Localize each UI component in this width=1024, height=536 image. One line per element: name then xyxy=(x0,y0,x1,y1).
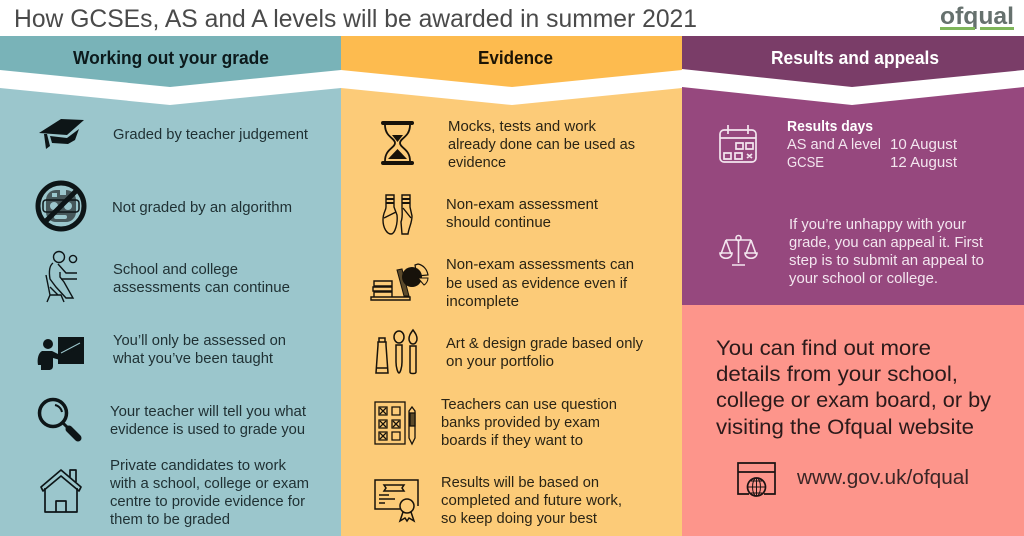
text: mocks and tests: evidence xyxy=(448,155,506,171)
text: not graded by an algorithm: Not graded by an algorithm xyxy=(112,200,292,216)
icon: house xyxy=(41,470,81,512)
icon: books and pie chart xyxy=(371,264,428,300)
text: find out more: You can find out more xyxy=(716,336,931,360)
text: art and design: on your portfolio xyxy=(446,354,554,370)
text: results based on work xyxy=(441,475,622,527)
panel: results and appeals xyxy=(682,36,1024,305)
text: art and design xyxy=(446,336,644,370)
icon: scales of justice xyxy=(720,236,757,265)
text: results days: 10 August xyxy=(890,137,957,153)
text: art and design: Art & design grade based only xyxy=(446,336,644,352)
text: teacher tells evidence xyxy=(110,404,306,438)
text: question banks: Teachers can use question xyxy=(441,397,617,413)
icon: calendar xyxy=(720,125,756,162)
panel body: evidence xyxy=(341,88,682,536)
text: non-exam assessment continue: should continue xyxy=(446,215,551,231)
logo: ofqual: ofqual xyxy=(940,3,1014,30)
text: teacher tells evidence: Your teacher will tell you what xyxy=(110,404,306,420)
icon: web browser xyxy=(738,463,775,496)
text: private candidates: with a school, college or exam xyxy=(109,476,309,492)
text: website url: www.gov.uk/ofqual xyxy=(796,467,969,489)
panel: evidence xyxy=(341,36,682,536)
text: appeal: grade, you can appeal it. First xyxy=(789,235,983,251)
text: mocks and tests xyxy=(448,119,635,171)
text: teacher tells evidence: evidence is used to grade you xyxy=(110,422,305,438)
text: private candidates: centre to provide evidence for xyxy=(110,494,305,510)
text: private candidates xyxy=(109,458,309,528)
text: appeal: step is to submit an appeal to xyxy=(789,253,984,269)
text: private candidates: Private candidates to work xyxy=(110,458,287,474)
title: How GCSEs, AS and A levels will be awarded in summer 2021 xyxy=(14,5,697,33)
icon: question sheet and pen xyxy=(375,402,415,444)
header band: working out your grade xyxy=(0,36,341,87)
icon: certificate xyxy=(375,480,418,521)
text: non-exam assessments as evidence xyxy=(446,257,634,310)
panel: working out your grade xyxy=(0,36,341,536)
text: find out more: visiting the Ofqual website xyxy=(716,415,974,439)
text: mocks and tests: Mocks, tests and work xyxy=(448,119,597,135)
text: non-exam assessments as evidence: incomplete xyxy=(446,294,519,310)
text: appeal: If you’re unhappy with your xyxy=(789,217,966,233)
text: results based on work: so keep doing your best xyxy=(441,511,597,527)
icon: crossed out robot xyxy=(38,183,84,229)
panel body: working out your grade xyxy=(0,88,341,536)
text: private candidates: them to be graded xyxy=(110,512,230,528)
text: only assessed on what taught: what you’ve been taught xyxy=(112,351,273,367)
text: non-exam assessments as evidence: Non-exam assessments can xyxy=(446,257,634,273)
header band: evidence xyxy=(341,36,682,87)
panel body: results and appeals xyxy=(682,87,1024,305)
text: non-exam assessment continue xyxy=(446,197,598,231)
text: only assessed on what taught: You’ll only be assessed on xyxy=(113,333,286,349)
header band: results and appeals xyxy=(682,36,1024,87)
text: mocks and tests: already done can be used as xyxy=(448,137,635,153)
text: school and college assessments: assessments can continue xyxy=(113,280,290,296)
icon: paint tube and brushes xyxy=(376,330,417,374)
text: question banks: boards if they want to xyxy=(441,433,583,449)
panel: find out more xyxy=(682,305,1024,536)
icon: teacher at blackboard xyxy=(38,337,84,370)
text: results days: AS and A level xyxy=(787,137,881,153)
icon: student at desk xyxy=(46,252,77,302)
text: results days: GCSE xyxy=(787,155,824,171)
icon: hourglass xyxy=(381,121,414,165)
text: results days xyxy=(787,119,957,171)
heading: evidence: Evidence xyxy=(478,48,553,68)
text: results days: Results days xyxy=(787,119,873,135)
text: only assessed on what taught xyxy=(112,333,286,367)
icon: graduation cap xyxy=(39,119,84,149)
text: appeal xyxy=(789,217,984,287)
text: school and college assessments xyxy=(113,262,290,296)
text: find out more: details from your school, xyxy=(716,362,958,386)
text: non-exam assessments as evidence: be used as evidence even if xyxy=(446,276,628,292)
text: question banks: banks provided by exam xyxy=(441,415,600,431)
text: non-exam assessment continue: Non-exam assessment xyxy=(446,197,598,213)
heading: working out your grade: Working out your grade xyxy=(73,48,269,68)
text: appeal: your school or college. xyxy=(789,271,938,287)
text: results based on work: Results will be based on xyxy=(441,475,599,491)
text: find out more: college or exam board, or by xyxy=(716,388,991,412)
heading: results and appeals: Results and appeals xyxy=(771,48,939,68)
text: graded by teacher judgement: Graded by teacher judgement xyxy=(113,127,308,143)
icon: magnifying glass xyxy=(40,400,78,438)
icon: ballet shoes xyxy=(383,195,412,234)
text: question banks xyxy=(441,397,617,449)
text: school and college assessments: School and college xyxy=(113,262,238,278)
text: find out more xyxy=(716,336,991,439)
text: results days: 12 August xyxy=(890,155,957,171)
text: results based on work: completed and future work, xyxy=(441,493,622,509)
